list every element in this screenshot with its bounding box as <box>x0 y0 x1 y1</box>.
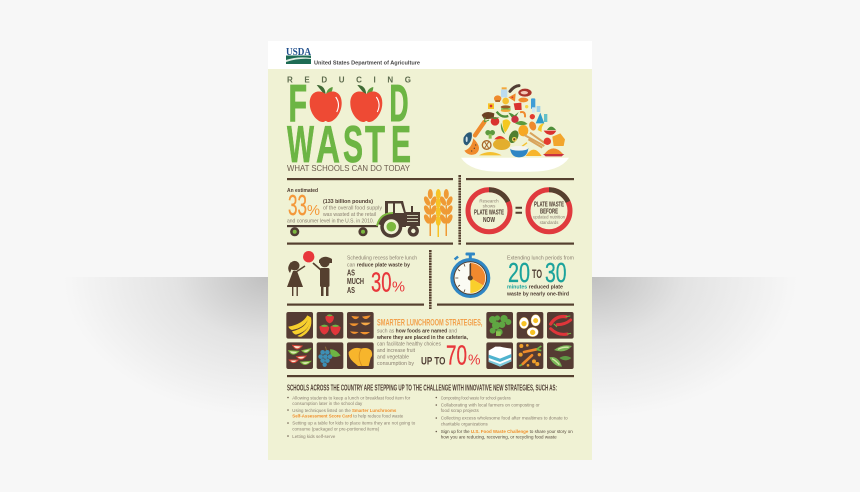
rope divider middle <box>429 250 432 309</box>
list: left strategies: Letting kids self-serve <box>292 434 336 439</box>
food pyramid on plate <box>461 86 569 172</box>
rope divider top <box>458 175 461 245</box>
title: waste: E <box>391 116 411 174</box>
text: as much as <box>347 268 364 295</box>
food tiles left <box>286 312 374 369</box>
icon: broccoli <box>489 315 511 336</box>
panel: smarter lunchroom <box>286 312 574 370</box>
stat: 20 to 30: TO <box>532 267 542 281</box>
text: reduced plate waste: minutes reduced plate <box>507 284 563 290</box>
food tiles right <box>486 312 574 369</box>
poster background <box>268 41 592 460</box>
text: as much as: AS <box>347 286 355 295</box>
stat: up to 70%: UP TO <box>421 355 446 367</box>
list: right strategies: Collecting excess wholesome food after mealtimes to donate to <box>441 416 568 421</box>
stat: up to 70% <box>421 339 480 370</box>
list: left strategies: consume (packaged or pre-portioned items) <box>292 426 380 432</box>
foods <box>463 86 565 157</box>
panel: longer lunch periods <box>450 252 574 298</box>
text: description: of the overall food supply <box>323 206 382 212</box>
stat: 30%: 30 <box>371 267 392 298</box>
icon: grapes <box>318 347 341 367</box>
text: as much as: AS <box>347 268 355 278</box>
icon: children with ball <box>287 251 332 296</box>
title: waste: T <box>365 116 385 174</box>
stat: up to 70%: % <box>468 351 480 368</box>
text: lunchroom description: consumption by <box>377 361 414 367</box>
text: scheduling recess <box>347 256 417 268</box>
ring: plate waste before: standards <box>540 220 558 225</box>
list: right strategies: Collaborating with local farmers on composting or <box>441 403 540 408</box>
title: waste: W <box>287 116 314 174</box>
ring: plate waste now <box>468 190 510 232</box>
stat: 30%: % <box>392 279 405 296</box>
list: left strategies: Self-Assessment Score Card to help reduce food waste <box>292 414 404 418</box>
text: lunchroom description: such as how foods are named and <box>377 328 457 334</box>
text: lunchroom description <box>376 328 468 367</box>
stat: 20 to 30 <box>508 257 566 288</box>
subtitle: WHAT SCHOOLS CAN DO TODAY <box>287 163 410 173</box>
ring: plate waste now: Research <box>479 198 499 204</box>
icon: toast <box>349 348 372 366</box>
text: reduced plate waste: waste by nearly one-third <box>506 291 569 297</box>
icon: apple right <box>350 85 382 122</box>
page drop shadow <box>50 277 810 427</box>
list: right strategies: charitable organizations <box>441 421 488 426</box>
USDA logo: USDA <box>286 47 311 58</box>
panel: 33 percent <box>287 188 454 238</box>
text: lunchroom description: and vegetable <box>377 354 409 360</box>
icon: apple slices <box>289 345 311 365</box>
icon: tractor and wagon <box>287 201 420 238</box>
icon: strawberries <box>319 314 341 335</box>
text: description: (133 billion pounds) <box>323 199 373 205</box>
ring: plate waste now: NOW <box>483 215 496 224</box>
ring: plate waste before: updated nutrition <box>533 214 566 220</box>
list: right strategies: Sign up for the U.S. Food Waste Challenge to share your story on <box>441 429 573 434</box>
title: waste: S <box>343 116 363 174</box>
text: as much as: MUCH <box>347 277 364 286</box>
list: left strategies: Allowing students to keep a lunch or breakfast food item for <box>292 395 411 400</box>
title: food with apples: D <box>390 75 408 133</box>
icon: chili peppers <box>551 316 571 334</box>
panel: plate waste comparison <box>468 190 570 232</box>
text: lunchroom description: and increase fruit <box>377 348 415 354</box>
icon: apple left <box>310 85 342 122</box>
ring: plate waste now: PLATE WASTE <box>474 208 504 216</box>
icon: bananas <box>288 315 311 337</box>
text: scheduling recess: Scheduling recess before lunch <box>347 256 417 262</box>
list: left strategies: Setting up a table for kids to place items they are not going to <box>292 421 416 426</box>
equals sign <box>516 208 522 213</box>
list: left strategies: Using techniques listed on the Smarter Lunchrooms <box>292 408 397 413</box>
icon: orange slices <box>349 315 371 334</box>
panel: recess before lunch <box>287 251 417 298</box>
section rules <box>287 178 574 377</box>
text: description <box>287 199 382 224</box>
USDA logo <box>286 47 420 66</box>
ring: plate waste now: shows <box>483 204 496 208</box>
title: waste <box>287 116 411 174</box>
list: left strategies <box>287 395 416 439</box>
icon: carrots and oranges <box>519 344 541 367</box>
stat: 33%: 33 <box>288 190 307 222</box>
list: left strategies: consumption later in the school day <box>292 401 363 406</box>
title: food with apples <box>288 75 408 133</box>
poster <box>268 41 592 460</box>
list: right strategies: food scrap projects <box>441 408 479 413</box>
icon: plate <box>461 158 569 172</box>
text: lunchroom description: where they are placed in the cafeteria, <box>376 335 468 341</box>
stat: up to 70%: 70 <box>446 339 467 370</box>
icon: pea pods <box>549 345 572 367</box>
USDA logo: United States Department of Agriculture <box>314 60 420 66</box>
icon: eggs <box>519 315 540 337</box>
stat: 20 to 30: 20 <box>508 257 530 288</box>
list: right strategies: how you are reducing, recovering, or recycling food waste <box>441 435 557 440</box>
list: right strategies: Composting food waste for school gardens <box>441 395 511 400</box>
title: waste: A <box>316 116 340 174</box>
text: description: and consumer level in the U.S. in 2010. <box>287 218 374 224</box>
text: reduced plate waste <box>506 284 569 297</box>
title: food with apples: F <box>288 75 307 133</box>
text: extending lunch: Extending lunch periods from <box>507 256 574 262</box>
text: an estimated: An estimated <box>287 188 318 194</box>
ring: plate waste before <box>528 190 570 232</box>
ring: plate waste before: BEFORE <box>540 206 558 216</box>
heading: schools across the country: SCHOOLS ACROSS THE COUNTRY ARE STEPPING UP TO THE CHALLENGE WITH INNOVATIVE NEW STRATEGIES, SUCH AS: <box>287 382 557 392</box>
text: scheduling recess: can reduce plate waste by <box>347 262 410 268</box>
ring: plate waste before: PLATE WASTE <box>534 200 564 208</box>
title: reducing: REDUCING <box>287 75 411 84</box>
icon: stopwatch <box>450 252 490 298</box>
text: lunchroom description: can facilitate healthy choices <box>377 342 441 348</box>
icon: milk cartons <box>489 347 511 367</box>
text: smarter lunchroom heading: SMARTER LUNCHROOM STRATEGIES, <box>377 318 482 328</box>
stat: 20 to 30: 30 <box>545 257 566 288</box>
icon: wheat <box>423 189 454 237</box>
list: right strategies <box>436 395 573 440</box>
stat: 33%: % <box>307 202 320 219</box>
text: description: was wasted at the retail <box>322 212 376 218</box>
